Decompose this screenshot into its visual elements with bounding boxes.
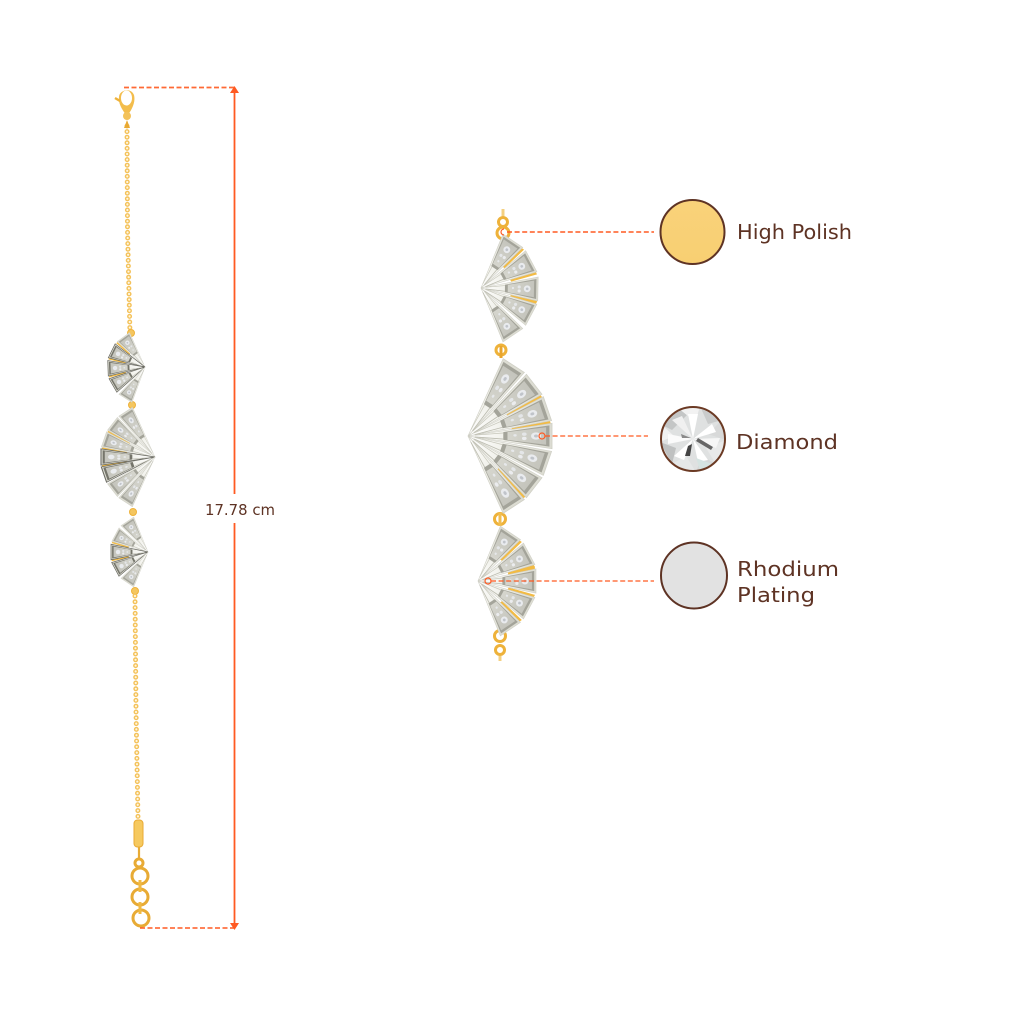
label: rhodium plating: Rhodium — [737, 557, 839, 581]
top chain links — [494, 209, 509, 661]
label: diamond: Diamond — [736, 430, 838, 454]
swatch: high polish — [660, 200, 724, 264]
bottom fan — [468, 526, 536, 636]
label: rhodium plating: Plating — [737, 583, 815, 607]
label: high polish: High Polish — [737, 220, 852, 244]
leader: rhodium plating — [485, 578, 654, 584]
left top fan — [107, 332, 153, 403]
enlarged pendant detail — [457, 209, 552, 661]
leader: diamond — [539, 433, 648, 439]
large center fan — [457, 359, 552, 513]
full bracelet — [101, 90, 162, 926]
connector rings between small and large fans — [128, 330, 138, 594]
extender bar — [134, 820, 143, 847]
upper chain — [127, 126, 130, 334]
lower chain — [135, 596, 138, 818]
length dimension — [124, 86, 275, 930]
left bottom fan — [111, 517, 154, 587]
length label: 17.78 cm — [205, 501, 275, 519]
extender rings — [132, 847, 149, 926]
swatch: rhodium plating — [661, 542, 727, 608]
top fan — [471, 234, 538, 342]
leader: high polish — [501, 229, 654, 235]
lobster clasp — [115, 90, 134, 128]
left large fan — [101, 407, 162, 507]
swatch: diamond — [660, 406, 726, 472]
